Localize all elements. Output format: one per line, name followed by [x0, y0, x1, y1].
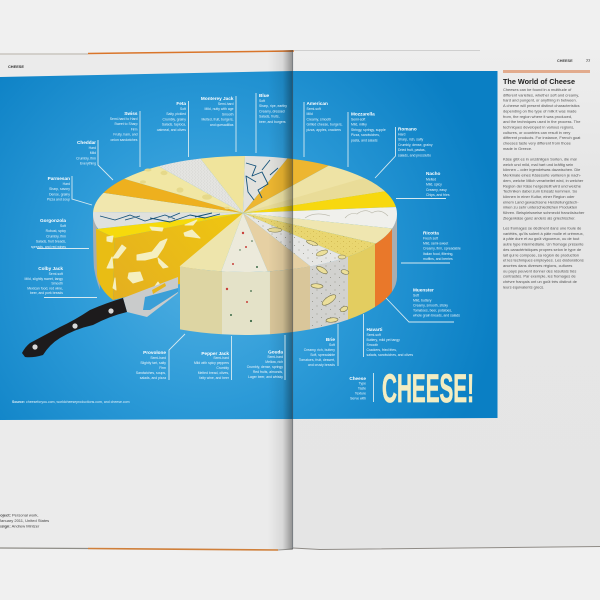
label: Monterey Jack: Mild, nutty with age — [204, 107, 234, 111]
label: Gorgonzola: Soft — [60, 224, 66, 228]
label: Swiss: Swiss — [124, 111, 138, 116]
label: Havarti: Semi-soft — [366, 333, 381, 337]
label: Blue: Sharp, ripe, earthy — [259, 104, 287, 108]
body text: French: ancrées dans diverses régions, cultures — [503, 263, 572, 268]
label: Feta: oatmeal, and olives — [157, 128, 186, 132]
label: American: Creamy, smooth — [306, 117, 331, 121]
label: Brie: Tomatoes, fruit, dessert, — [299, 358, 335, 362]
cream spots on gold — [107, 220, 200, 293]
label: Monterey Jack: and quesadillas — [210, 123, 234, 127]
label: Nacho: Mild, spicy — [426, 183, 442, 187]
label: Ricotta: Fresh soft — [423, 236, 438, 240]
label: Romano: salads, and prosciutto — [398, 153, 431, 157]
label: Pepper Jack: Melted bread, olives, — [198, 371, 229, 375]
label: Pepper Jack — [194, 336, 232, 380]
label: Cheddar — [76, 140, 113, 180]
legend: Cheese key: Texture — [355, 392, 366, 396]
body text: French: variétés, qu'ils soient à pâte molle et crémeux, — [503, 231, 584, 236]
label: American: Mild — [306, 112, 313, 116]
label: Gouda: Lager beer, and whisky — [248, 375, 283, 379]
top edge of book — [0, 50, 480, 54]
label: Gouda: Red fruits, almonds, — [253, 370, 283, 374]
label: Provolone: Slightly tart, salty — [140, 361, 166, 365]
label: Gouda: Crumbly, dense, springy — [247, 365, 283, 369]
front wedge: tan side — [270, 266, 310, 334]
label: Provolone: Provolone — [143, 350, 166, 355]
label: Colby Jack — [25, 266, 97, 298]
label: Monterey Jack: Smooth — [222, 112, 234, 116]
body text: German: Techniken dabei zum Einsatz kommen. So — [503, 189, 578, 194]
label: Havarti: Smooth — [366, 343, 378, 347]
top face slices — [93, 156, 397, 272]
label: Ricotta: muffins, and berries — [423, 257, 453, 261]
label: Gouda: Mellow, rich — [265, 360, 283, 364]
label: Parmesan: Dense, grainy — [49, 192, 70, 196]
source note: Source: cheeseforyou.com, worldcheeseproductions.com, and cheese.com — [12, 400, 130, 404]
label: Swiss — [110, 111, 140, 167]
label: Romano — [375, 126, 433, 178]
body text: German: Region der Käse hergestellt wird und welche — [503, 183, 582, 188]
body text: French: chèvre français ont un goût très distinct de — [503, 279, 578, 284]
body text: German: Ziegenkäse ganz anders als griechischer. — [503, 215, 575, 220]
label: Colby Jack: Colby Jack — [38, 266, 63, 271]
label: Parmesan — [47, 176, 92, 205]
label: Swiss: Semi-hard to Hard — [110, 117, 138, 121]
holes in speckled side — [311, 265, 349, 323]
body text: English: hard and pungent, or anything in between. — [503, 98, 577, 103]
label: Nacho: Chips, and fries — [426, 193, 450, 197]
body text: French: lait qui le compose, sa région de production — [503, 252, 579, 257]
body text: German: können in einer Kultur, einer Region oder — [503, 194, 575, 199]
label: Gorgonzola — [31, 218, 89, 249]
label: Cheddar: Crumbly, firm — [76, 156, 96, 160]
label: Swiss: Sweet to Sharp — [114, 122, 138, 126]
label: Swiss: Fruity, ham, and — [113, 133, 138, 137]
right page header: 77 — [586, 59, 590, 63]
label: Havarti: salads, sandwiches, and olives — [366, 353, 413, 357]
label: Ricotta: Italian food, filtering, — [423, 252, 453, 256]
label: Cheddar: Hard — [89, 146, 96, 150]
bright yellow top face — [96, 213, 243, 238]
panel: left page — [0, 50, 293, 550]
knife hole — [143, 288, 178, 310]
label: Muenster: Mild, buttery — [413, 298, 432, 302]
right side: speckled cheese — [310, 257, 348, 329]
label: Provolone: salads, and pizza — [140, 376, 166, 380]
legend: Cheese key: Serve with — [350, 396, 366, 400]
panel: right page — [293, 50, 600, 549]
label: Feta: Crumbly, grainy — [162, 117, 186, 121]
front wedge: middle side — [222, 271, 270, 335]
left grey rind — [93, 212, 100, 290]
body text: English: and the techniques used in the process. The — [503, 119, 581, 124]
label: Romano: Crumbly, dense, grainy — [398, 143, 433, 147]
label: Nacho — [396, 171, 450, 198]
right page header — [557, 59, 590, 63]
label: Muenster: Muenster — [413, 288, 434, 292]
label: American: Semi-soft — [306, 107, 321, 111]
label: Romano: Romano — [398, 126, 417, 132]
label: Parmesan: Hard — [63, 182, 70, 186]
label: Provolone: Firm — [159, 366, 166, 370]
label: Monterey Jack: Melted, fruit, burgers, — [201, 118, 234, 122]
body text: German: führen. Beispielsweise schmeckt französischer — [503, 210, 585, 215]
label: Parmesan: Parmesan — [48, 176, 70, 181]
label: Gorgonzola: Salads, fruit breads, — [36, 240, 66, 244]
legend: Cheese key — [349, 373, 374, 402]
right page header: CHEESE — [557, 59, 573, 63]
body text: French: ou pays peuvent donner des résultats très — [503, 268, 576, 273]
label: Muenster: Creamy, smooth, sticky — [413, 304, 448, 308]
main title: CHEESE! — [382, 367, 474, 411]
label: Havarti: Buttery, mild yet tangy — [366, 338, 400, 342]
left page header: CHEESE — [8, 64, 24, 69]
body text: German: Käse gibt es in unzähligen Sorten, die mal — [503, 156, 577, 162]
label: Colby Jack: beer, and pork breads — [30, 291, 63, 295]
label: Mozzarella — [348, 112, 386, 167]
label: American: pizza, apples, crackers — [306, 128, 341, 132]
label: Ricotta: Creamy, firm, spreadable — [423, 247, 461, 251]
label: Muenster: Soft — [413, 294, 419, 298]
label: Monterey Jack: Monterey Jack — [201, 96, 234, 101]
body text: English: different products. For instance, French goat — [503, 135, 581, 140]
label: Pepper Jack: Semi-hard — [213, 356, 229, 360]
label: Cheddar: Cheddar — [77, 140, 96, 145]
label: Brie: and crusty breads — [308, 363, 335, 367]
legend: Cheese key: Cheese — [349, 376, 366, 381]
label: Blue: beer, and burgers — [259, 120, 286, 124]
label: Cheddar: Everything — [80, 162, 96, 166]
label: Feta: Salty, pickled — [166, 112, 186, 116]
label: Parmesan: Pizza and soup — [47, 198, 70, 202]
body text: German: dem, welche Milch verarbeitet wird, in welcher — [503, 178, 584, 183]
knife handle — [22, 298, 127, 357]
body text: French: autre type intermédiaire. Un fromage présente — [503, 242, 584, 247]
label: Provolone: Sandwiches, soups, — [136, 371, 166, 375]
body text: German: einem Land gewachsene Herstellungstech- — [503, 199, 579, 204]
body text: French: Les fromages se déclinent dans une foule de — [503, 226, 582, 230]
label: Blue: Creamy, dressed — [259, 109, 285, 113]
label: Colby Jack: Mild, slightly sweet, tangy — [25, 277, 63, 281]
label: Blue: Blue — [259, 93, 270, 98]
label: Provolone — [136, 334, 185, 380]
heading: The World of Cheese — [503, 77, 575, 86]
right side: orange rind — [375, 229, 392, 307]
bottom edge of book — [0, 546, 600, 550]
rivets — [32, 308, 114, 350]
label: Brie: Brie — [326, 337, 335, 342]
label: Colby Jack: Smooth — [51, 282, 63, 286]
Swiss holes — [140, 168, 230, 209]
label: Muenster — [386, 288, 460, 322]
label: Pepper Jack: Pepper Jack — [201, 351, 229, 356]
label: Pepper Jack: Mild with spicy peppers — [194, 361, 229, 365]
label: Romano: Dried fruit, pastas, — [398, 148, 426, 152]
gold cut face — [113, 213, 243, 300]
knife blade — [123, 277, 178, 317]
label: Romano: Hard — [398, 132, 405, 136]
body text: English: A cheese will present distinct characteristics — [503, 103, 580, 108]
spine shadow, left — [268, 50, 292, 550]
label: Colby Jack: Semi-soft — [49, 272, 63, 276]
legend: Cheese key: Type — [359, 382, 366, 386]
label: Gorgonzola: spreads, and red wines — [31, 245, 66, 249]
label: American: American — [306, 101, 328, 106]
gold left face — [96, 229, 115, 300]
label: Nacho: Nacho — [426, 171, 440, 176]
label: Mozzarella: Mozzarella — [351, 112, 375, 116]
body text: French: contrastés. Par exemple, les fromages de — [503, 274, 576, 279]
label: Swiss: Firm — [131, 127, 138, 131]
body text: English: cultures, or countries can result in very — [503, 130, 570, 135]
pepper flecks — [226, 232, 258, 322]
label: American — [304, 101, 343, 157]
ovals on top slice — [268, 228, 346, 259]
label: Romano: Sharp, rich, salty — [398, 138, 424, 142]
white slice clouds — [305, 211, 388, 218]
label: Ricotta: Ricotta — [423, 230, 439, 236]
label: Swiss: onion sandwiches — [111, 138, 138, 142]
right side: grey rim — [392, 214, 397, 292]
label: Brie: Soft — [329, 343, 335, 347]
knife slot — [152, 283, 166, 294]
label: Gorgonzola: Crumbly, firm — [46, 234, 66, 238]
spine line — [292, 50, 294, 549]
label: Pepper Jack: fatty wine, and beer — [199, 376, 230, 380]
label: Pepper Jack: Crumbly — [216, 366, 229, 370]
front wedge: left side — [180, 266, 222, 334]
body text: English: cheeses taste very different from those — [503, 141, 572, 146]
label: Brie: Soft, spreadable — [310, 353, 335, 357]
body text: French: à pâte dure et au goût vigoureux, ou de tout — [503, 236, 580, 241]
label: Colby Jack: Mexican food, red wine, — [27, 286, 63, 290]
body text: German: niken zu sehr unterschiedlichen Produkten — [503, 205, 577, 210]
body text: English: depending on the type of milk it was made — [503, 108, 577, 113]
body text: French: leurs équivalents grecs. — [503, 284, 544, 289]
label: Brie — [299, 324, 338, 367]
label: Gorgonzola: Gorgonzola — [40, 218, 66, 223]
label: Mozzarella: Semi-soft — [351, 118, 365, 122]
knife — [22, 277, 178, 357]
label: Muenster: whole grain breads, and salads — [413, 314, 460, 318]
label: Feta: Salads, tapioca, — [162, 123, 186, 127]
label: Blue: Soft — [259, 99, 265, 103]
label: Monterey Jack: Semi-hard — [218, 102, 234, 106]
label: Monterey Jack — [201, 96, 236, 152]
label: Havarti: Crackers, fried fries, — [366, 348, 397, 352]
label: Mozzarella: Mild, milky — [351, 123, 367, 127]
label: Ricotta — [401, 230, 461, 263]
label: Feta: Soft — [180, 107, 186, 111]
body text: German: Merkmale eines Käsesorte variieren je nach- — [503, 173, 582, 178]
body text: French: et les techniques employées. Les élaborations — [503, 258, 584, 263]
label: Gouda — [247, 335, 285, 380]
body text: French: des caractéristiques propres selon le type de — [503, 247, 582, 252]
heading rule — [503, 70, 590, 73]
body text: English: different varieties, whether soft and creamy, — [503, 92, 579, 97]
label: Feta — [157, 101, 188, 157]
blue chart background — [0, 71, 498, 420]
label: Gouda: Semi-hard — [267, 355, 283, 359]
label: Feta: Feta — [176, 101, 186, 106]
body text: English: Cheeses can be found in a multitude of — [503, 87, 572, 92]
body text: English: from, the region where it was produced, — [503, 114, 572, 119]
label: Cheddar: Mild — [90, 151, 96, 155]
right side: yellow cheese — [348, 244, 375, 320]
label: Parmesan: Sharp, savory — [49, 187, 70, 191]
label: Ricotta: Mild, semi-sweet — [423, 242, 448, 246]
label: Nacho: Melted — [426, 178, 436, 182]
label: Mozzarella: Stringy, springy, supple — [351, 128, 386, 132]
label: Gouda: Gouda — [268, 350, 283, 354]
label: Blue: Salads, fruits, — [259, 115, 280, 119]
label: Blue — [256, 93, 287, 153]
cheese wheel — [22, 156, 397, 358]
body text: English: made in Greece. — [503, 146, 532, 151]
label: Mozzarella: pasta, and salads — [351, 138, 378, 142]
body text: German: können – oder irgendetwas dazwischen. Die — [503, 167, 581, 172]
label: Nacho: Creamy, easy — [426, 188, 447, 192]
label: Muenster: Tomatoes, beer, potatoes, — [413, 308, 452, 312]
label: Mozzarella: Pizza, sandwiches, — [351, 133, 380, 137]
legend: Cheese key: Taste — [358, 386, 366, 390]
label: Provolone: Semi-hard — [150, 356, 166, 360]
body text: German: weich und mild, mal hart und kräftig sein — [503, 162, 573, 167]
label: Gorgonzola: Robust, spicy — [46, 229, 66, 233]
label: Brie: Creamy, rich, buttery — [304, 348, 335, 352]
label: Havarti: Havarti — [366, 327, 382, 332]
blue veins: top slice — [100, 160, 278, 222]
body text: English: techniques developed in various regions, — [503, 125, 574, 130]
label: Havarti — [364, 314, 413, 357]
project credits: January 2011, United States — [0, 518, 49, 523]
label: American: Grilled cheese, burgers, — [306, 123, 343, 127]
